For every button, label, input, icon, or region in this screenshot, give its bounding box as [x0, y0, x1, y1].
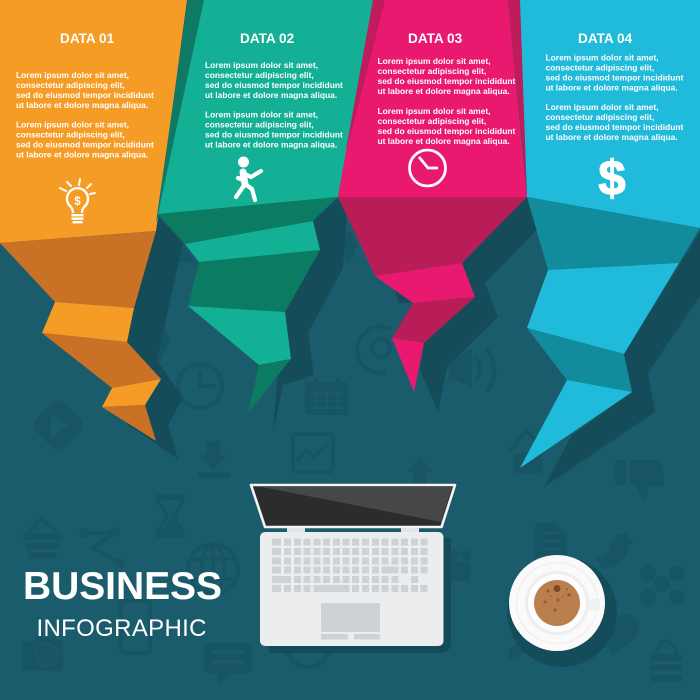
text block: ut labore et dolore magna aliqua.	[378, 136, 510, 146]
hinges	[287, 528, 419, 533]
icon: speech bubble	[204, 643, 252, 684]
icon: speaker	[449, 348, 494, 392]
panel: data 01 orange ribbon	[0, 0, 187, 459]
icon: clock	[410, 150, 446, 186]
cup	[525, 571, 589, 635]
laptop shadow	[268, 538, 451, 653]
icon: small shape near ribbon two	[177, 231, 357, 262]
touchpad	[321, 603, 380, 632]
panel: data 03 pink ribbon	[338, 0, 537, 412]
icon: light bulb	[152, 323, 169, 362]
text block: ut labore et dolore magna aliqua.	[16, 100, 148, 110]
coffee	[534, 580, 580, 626]
icon: photo camera	[22, 637, 63, 671]
text block: sed do eiusmod tempor incididunt	[16, 140, 154, 150]
ribbon shadow	[544, 232, 700, 487]
text block: sed do eiusmod tempor incididunt	[205, 80, 343, 90]
text block	[546, 52, 684, 142]
icon: thumbs down	[615, 460, 664, 500]
text block: Lorem ipsum dolor sit amet,	[205, 110, 318, 120]
background icons	[22, 231, 685, 684]
icon: play diamond	[30, 397, 86, 453]
text block: ut labore et dolore magna aliqua.	[16, 150, 148, 160]
icon: film camera	[445, 550, 471, 581]
text block	[205, 60, 343, 150]
ribbon shadow	[126, 217, 183, 459]
icon: calendar	[305, 377, 348, 415]
text block: consectetur adipiscing elit,	[378, 116, 486, 126]
icon: house	[509, 431, 545, 473]
title: INFOGRAPHIC	[36, 615, 206, 642]
text block	[378, 56, 516, 146]
icon: lock	[650, 641, 682, 682]
text block: ut labore et dolore magna aliqua.	[546, 132, 678, 142]
icon: at sign	[357, 327, 392, 373]
panel: data 04 blue ribbon	[520, 0, 700, 487]
text block: Lorem ipsum dolor sit amet,	[546, 102, 658, 112]
text block: Lorem ipsum dolor sit amet,	[16, 120, 129, 130]
cup handle	[588, 599, 600, 610]
heading: DATA 02	[240, 31, 295, 46]
text block: consectetur adipiscing elit,	[546, 62, 654, 72]
icon: upload arrow	[407, 457, 433, 484]
icon: phone	[121, 601, 150, 653]
icon: hourglass	[155, 494, 186, 538]
fold strips	[346, 0, 385, 150]
text block: sed do eiusmod tempor incididunt	[546, 122, 684, 132]
panel: data 02 green ribbon	[156, 0, 374, 433]
text block: sed do eiusmod tempor incididunt	[16, 90, 154, 100]
saucer	[509, 555, 605, 651]
cup shadow	[507, 557, 617, 667]
icon: line chart picture	[293, 434, 333, 472]
text block: consectetur adipiscing elit,	[546, 112, 654, 122]
text block: sed do eiusmod tempor incididunt	[378, 76, 516, 86]
text block: ut labore et dolore magna aliqua.	[546, 82, 678, 92]
text block: consectetur adipiscing elit,	[16, 80, 125, 90]
text block: ut labore et dolore magna aliqua.	[205, 140, 337, 150]
fold strip	[156, 0, 204, 222]
text block: consectetur adipiscing elit,	[205, 70, 314, 80]
ribbon shadow	[273, 197, 347, 433]
text block: Lorem ipsum dolor sit amet,	[378, 56, 490, 66]
text block: sed do eiusmod tempor incididunt	[378, 126, 516, 136]
text block: Lorem ipsum dolor sit amet,	[205, 60, 318, 70]
text block: Lorem ipsum dolor sit amet,	[546, 52, 658, 62]
text block: Lorem ipsum dolor sit amet,	[16, 70, 129, 80]
text block: sed do eiusmod tempor incididunt	[546, 72, 684, 82]
text block: sed do eiusmod tempor incididunt	[205, 130, 343, 140]
title: BUSINESS	[23, 565, 222, 608]
text block: ut labore et dolore magna aliqua.	[205, 90, 337, 100]
icon: basket	[22, 518, 63, 559]
text block: consectetur adipiscing elit,	[205, 120, 314, 130]
laptop	[251, 485, 455, 653]
text block	[16, 70, 154, 160]
heading: DATA 03	[408, 31, 463, 46]
text block: consectetur adipiscing elit,	[378, 66, 486, 76]
icon: running person	[236, 156, 261, 200]
icon: light bulb with dollar: $	[74, 196, 81, 208]
ribbon shadow	[420, 197, 537, 412]
coffee cup	[507, 555, 617, 667]
icon: heart	[604, 614, 639, 655]
laptop base	[260, 532, 444, 646]
icon: target under laptop	[286, 623, 330, 667]
icon: bird	[596, 533, 634, 569]
text block: consectetur adipiscing elit,	[16, 130, 125, 140]
keyboard	[272, 538, 428, 592]
icon: dollar sign: $	[598, 152, 626, 206]
icon: share	[79, 527, 125, 568]
icon: control buttons	[640, 565, 685, 605]
icon: download arrow	[197, 441, 230, 478]
touchpad buttons	[321, 634, 380, 640]
icon: globe	[188, 544, 238, 594]
heading: DATA 04	[578, 31, 633, 46]
heading: DATA 01	[60, 31, 115, 46]
icon: pencil	[507, 640, 528, 659]
text block: ut labore et dolore magna aliqua.	[378, 86, 510, 96]
title	[23, 565, 222, 642]
icon: light bulb with dollar	[60, 179, 95, 223]
icon: document	[535, 523, 567, 558]
text block: Lorem ipsum dolor sit amet,	[378, 106, 490, 116]
screen	[251, 485, 455, 527]
icon: clock	[178, 364, 222, 408]
